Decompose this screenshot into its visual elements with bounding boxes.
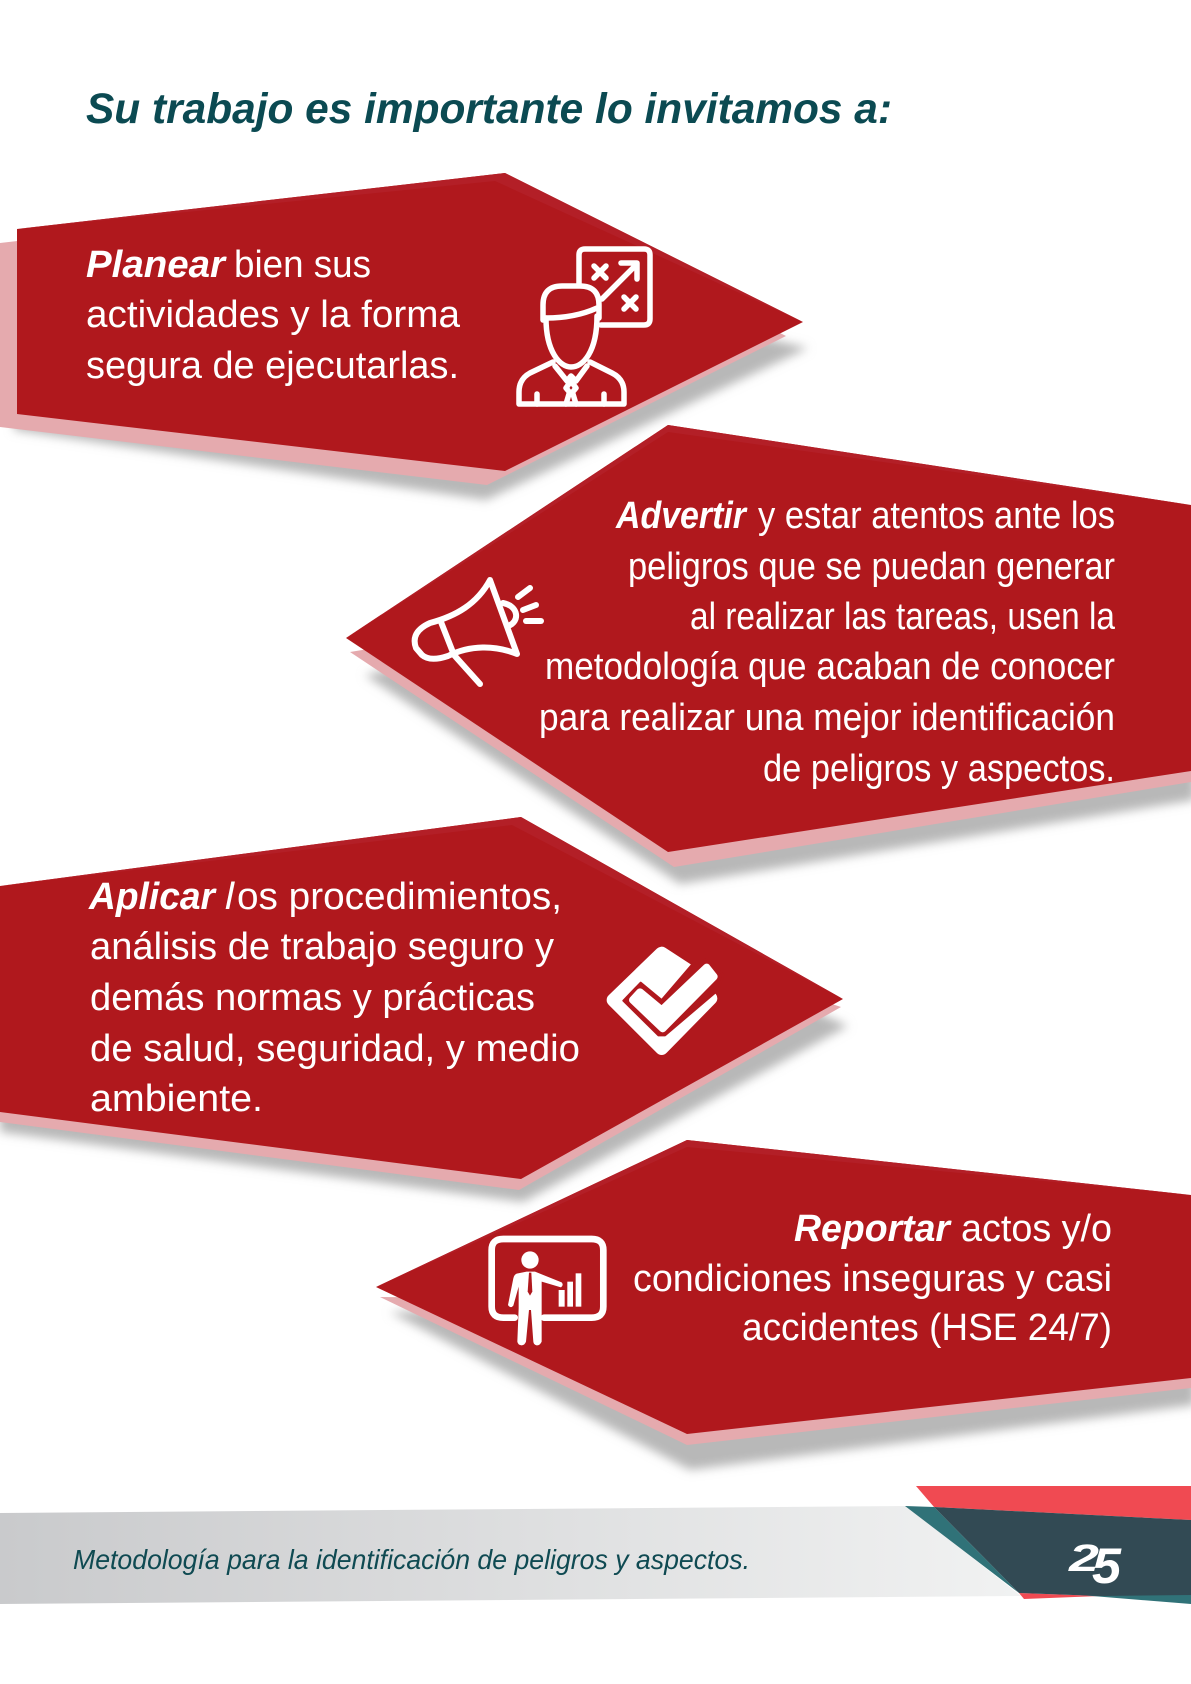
- text: advertir: al realizar las tareas, usen la: [690, 596, 1116, 638]
- text: reportar: [633, 1208, 1112, 1349]
- text: advertir: para realizar una mejor identificación: [539, 697, 1115, 739]
- text: aplicar: análisis de trabajo seguro y: [90, 926, 554, 968]
- panel: planear: [0, 173, 808, 500]
- text: planear: Planear: [86, 244, 227, 286]
- text: advertir: Advertir: [615, 495, 748, 537]
- panel: reportar: [376, 1140, 1191, 1470]
- text: reportar: condiciones inseguras y casi: [633, 1258, 1112, 1300]
- text: advertir: peligros que se puedan generar: [628, 546, 1115, 588]
- page number: 2: [1068, 1538, 1099, 1580]
- text: aplicar: demás normas y prácticas: [90, 977, 535, 1019]
- icon: megaphone: [415, 580, 541, 684]
- text: aplicar: [88, 876, 580, 1120]
- page number: [1068, 1538, 1122, 1594]
- text: planear: [86, 244, 461, 387]
- text: aplicar: ambiente.: [90, 1078, 263, 1120]
- text: advertir: metodología que acaban de conocer: [545, 646, 1115, 688]
- title: Su trabajo es importante lo invitamos a:: [86, 85, 892, 133]
- text: aplicar: de salud, seguridad, y medio: [90, 1028, 580, 1070]
- text: aplicar: Aplicar: [88, 876, 217, 918]
- text: advertir: [539, 495, 1116, 790]
- text: planear: actividades y la forma: [86, 294, 461, 336]
- panel: advertir: [346, 425, 1191, 884]
- text: planear: segura de ejecutarlas.: [86, 345, 459, 387]
- text: aplicar: os procedimientos,: [237, 876, 562, 918]
- icon: presenter with chart: [492, 1239, 603, 1345]
- footer text: Metodología para la identificación de peligros y aspectos.: [73, 1544, 750, 1575]
- footer corner shapes: [905, 1486, 1191, 1604]
- text: reportar: actos y/o: [961, 1208, 1112, 1250]
- footer band: [0, 1506, 1021, 1604]
- icon: check mark: [613, 953, 723, 1048]
- text: reportar: Reportar: [794, 1208, 952, 1250]
- text: aplicar: l: [225, 876, 236, 918]
- icon: planner with strategy board: [519, 249, 650, 404]
- page number: 5: [1092, 1538, 1122, 1594]
- text: reportar: accidentes (HSE 24/7): [742, 1307, 1112, 1349]
- panel: aplicar: [0, 817, 848, 1202]
- text: planear: bien sus: [234, 244, 371, 286]
- text: advertir: y estar atentos ante los: [758, 495, 1115, 537]
- text: advertir: de peligros y aspectos.: [763, 748, 1115, 790]
